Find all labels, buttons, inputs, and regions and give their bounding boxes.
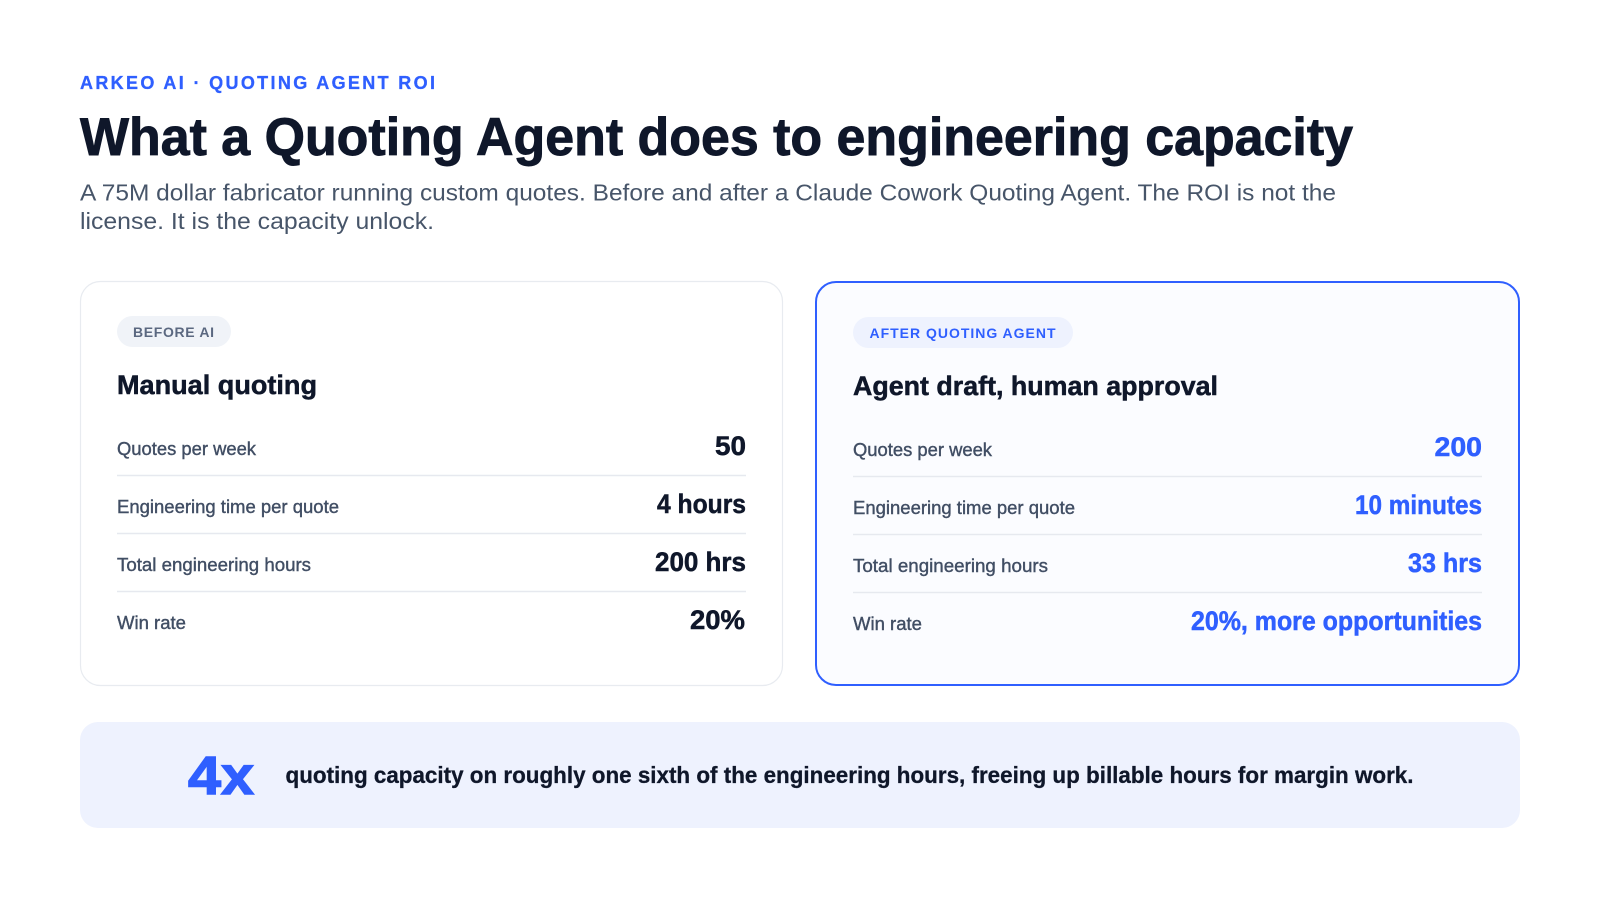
badge: after quoting agent: [853, 317, 1073, 348]
row: total engineering hours: Total engineering hours: [117, 554, 311, 575]
row: engineering time per quote: Engineering time per quote: [853, 497, 1075, 518]
row: engineering time per quote: [853, 490, 1482, 520]
panel: after quoting agent: [816, 282, 1519, 685]
panel: before AI: [80, 282, 782, 686]
row: quotes per week: [117, 431, 746, 461]
row: win rate: Win rate: [853, 613, 922, 634]
row: win rate: 20%, more opportunities: [1191, 606, 1482, 636]
callout text: quoting capacity on roughly one sixth of the engineering hours, freeing up billable hours for margin work.: [286, 762, 1414, 788]
row: quotes per week: Quotes per week: [853, 439, 993, 460]
panel heading: agent draft, human approval: Agent draft, human approval: [853, 371, 1218, 401]
row: total engineering hours: Total engineering hours: [853, 555, 1048, 576]
eyebrow: ARKEO AI · QUOTING AGENT ROI: [80, 73, 435, 93]
row: win rate: Win rate: [117, 612, 186, 633]
row: quotes per week: 200: [1434, 432, 1482, 462]
row: quotes per week: Quotes per week: [117, 438, 257, 459]
row: win rate: [117, 605, 745, 635]
row: win rate: [853, 606, 1482, 636]
row: engineering time per quote: [117, 489, 746, 519]
callout band: [80, 722, 1520, 828]
badge: before AI: [117, 316, 231, 347]
badge: before AI: BEFORE AI: [133, 324, 214, 340]
subtitle: license. It is the capacity unlock.: [80, 208, 434, 234]
row: total engineering hours: 200 hrs: [655, 547, 746, 577]
title: What a Quoting Agent does to engineering capacity: [80, 108, 1354, 167]
panel heading: manual quoting: Manual quoting: [117, 370, 317, 400]
row: engineering time per quote: Engineering time per quote: [117, 496, 339, 517]
row: total engineering hours: 33 hrs: [1408, 548, 1482, 578]
row: win rate: 20%: [690, 605, 745, 635]
row: engineering time per quote: 10 minutes: [1355, 490, 1482, 520]
row: engineering time per quote: 4 hours: [657, 489, 746, 519]
badge: after quoting agent: AFTER QUOTING AGENT: [870, 325, 1056, 341]
row: total engineering hours: [117, 547, 746, 577]
row: quotes per week: [853, 432, 1482, 462]
row: quotes per week: 50: [715, 431, 746, 461]
row: total engineering hours: [853, 548, 1482, 578]
subtitle: A 75M dollar fabricator running custom quotes. Before and after a Claude Cowork Quoting Agent. The ROI is not the: [80, 180, 1336, 206]
big stat: 4x: 4x: [188, 746, 254, 806]
subtitle: [80, 180, 1336, 234]
